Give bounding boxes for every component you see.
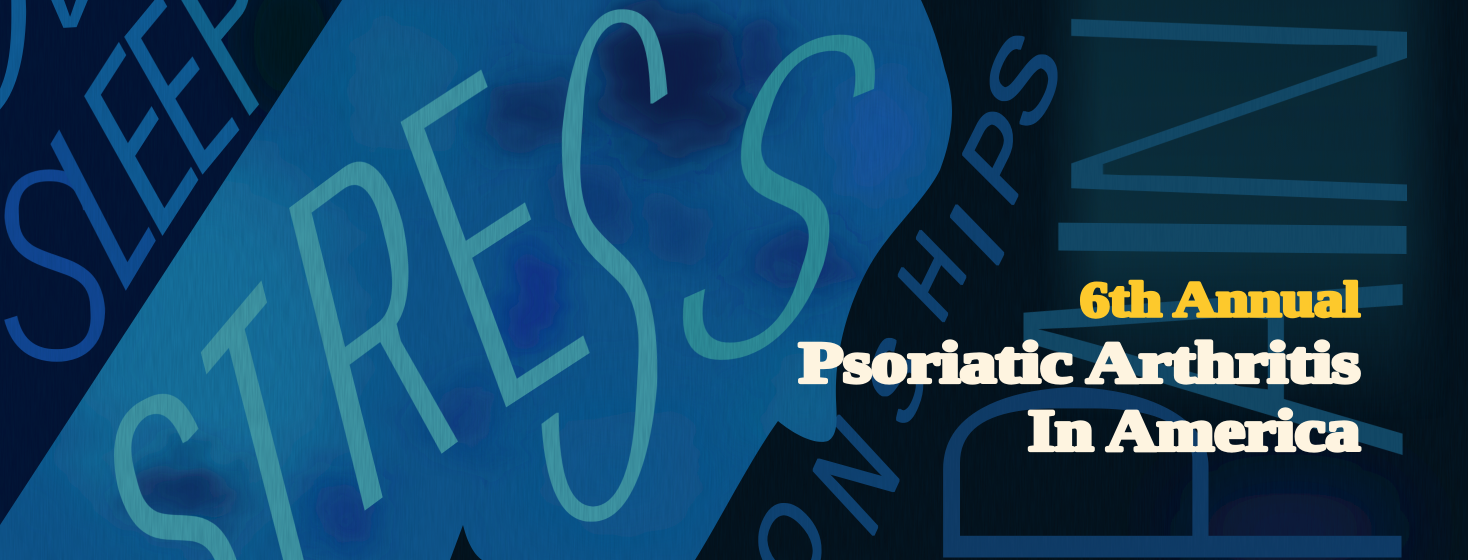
title: In America: In America — [1028, 398, 1360, 463]
title: 6th Annual: 6th Annual — [1080, 271, 1360, 327]
word: STRESS — [114, 9, 876, 560]
word: RELATIONSHIPS: I — [931, 179, 1023, 291]
word: RELATIONSHIPS: N — [792, 388, 921, 560]
word: SLEEP: E — [56, 0, 225, 287]
title block — [799, 271, 1360, 463]
word: SLEEP: L — [22, 44, 181, 344]
word: PAIN — [943, 18, 1407, 558]
word: RELATIONSHIPS: H — [882, 210, 983, 343]
word: RELATIONSHIPS: P — [944, 83, 1057, 228]
head silhouette — [0, 0, 1000, 560]
word: RELATIONSHIPS — [733, 8, 1082, 560]
title: Psoriatic Arthritis: Psoriatic Arthritis — [799, 330, 1360, 395]
word: RELATIONSHIPS: S — [853, 310, 942, 451]
word: SLEEP — [0, 0, 260, 362]
word: RELATIONSHIPS: S — [965, 8, 1082, 153]
